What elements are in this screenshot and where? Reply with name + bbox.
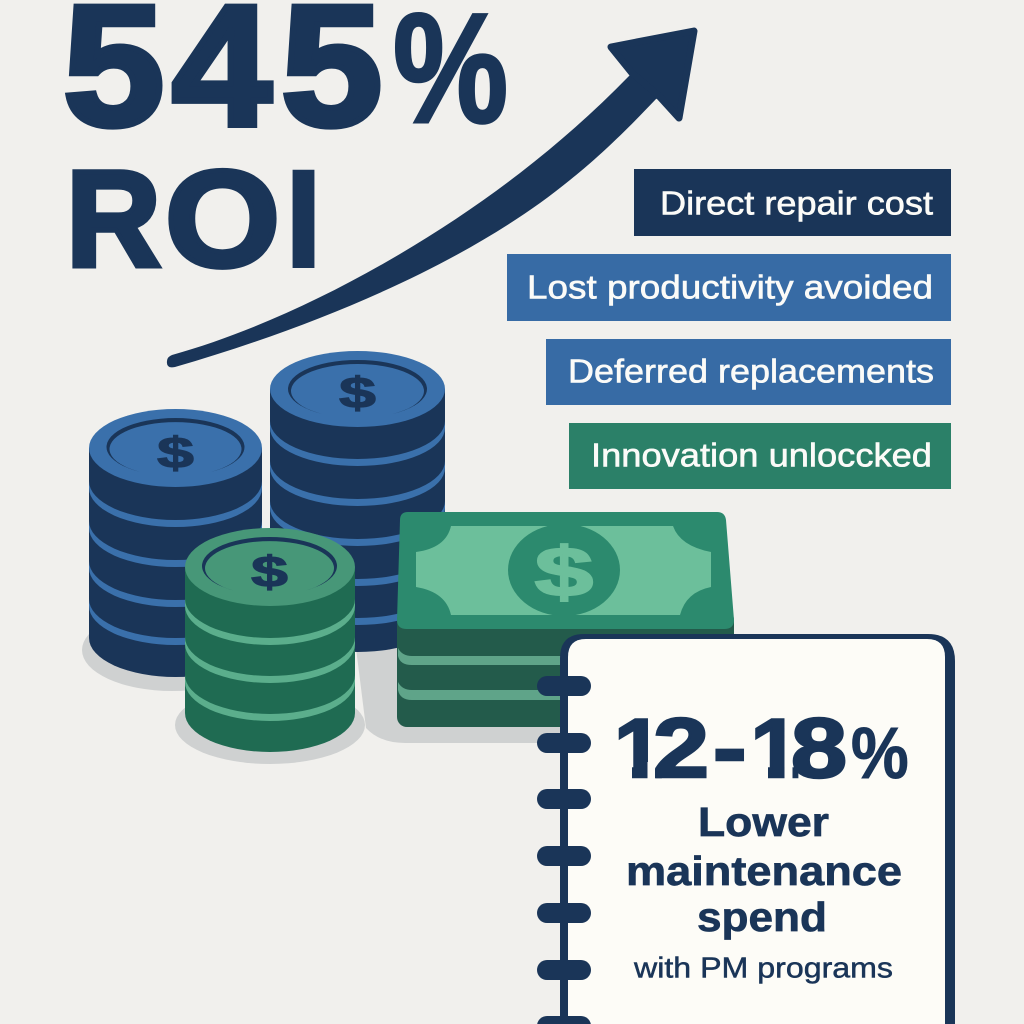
- label: direct repair cost: [634, 169, 951, 236]
- card text: Lower: [698, 799, 829, 845]
- label: deferred replacements: [546, 339, 951, 405]
- coin stack: short green: [185, 528, 355, 752]
- title: 545% ROI: [63, 0, 508, 296]
- icon: stack of banknotes: $: [535, 532, 593, 611]
- spiral binding rings: [537, 676, 591, 1024]
- card statistic: 2: [653, 701, 709, 795]
- coin stack: medium blue: [89, 409, 262, 677]
- ground shadows: [82, 609, 560, 764]
- card text: [626, 799, 902, 984]
- card statistic: -: [713, 701, 747, 795]
- legend labels: [507, 169, 951, 489]
- card statistic: 1: [750, 702, 800, 796]
- panel: notebook card: [537, 634, 955, 1024]
- icon: stack of banknotes: [397, 512, 734, 727]
- coin stack: short green: $: [251, 547, 288, 596]
- card statistic: 8: [791, 701, 847, 795]
- label: direct repair cost: Direct repair cost: [660, 184, 933, 222]
- label: innovation unlocked: [569, 423, 951, 489]
- icon: rising arrow: [167, 31, 694, 367]
- label: innovation unlocked: Innovation unloccked: [591, 436, 932, 474]
- label: lost productivity avoided: [507, 254, 951, 321]
- card statistic: [604, 701, 909, 796]
- card text: with PM programs: [633, 952, 893, 984]
- card statistic: %: [851, 713, 909, 794]
- coin stack: medium blue: $: [157, 428, 194, 477]
- coin stack: tall blue: $: [339, 368, 376, 417]
- card text: maintenance: [626, 848, 902, 894]
- card statistic: 1: [614, 702, 663, 796]
- title: 545% ROI: O: [165, 143, 280, 296]
- label: deferred replacements: Deferred replacements: [568, 352, 934, 390]
- title: 545% ROI: I: [286, 142, 321, 295]
- coin stack: tall blue: [270, 351, 445, 652]
- label: lost productivity avoided: Lost productivity avoided: [527, 268, 933, 306]
- card text: spend: [697, 894, 827, 940]
- title: 545% ROI: R: [66, 143, 161, 296]
